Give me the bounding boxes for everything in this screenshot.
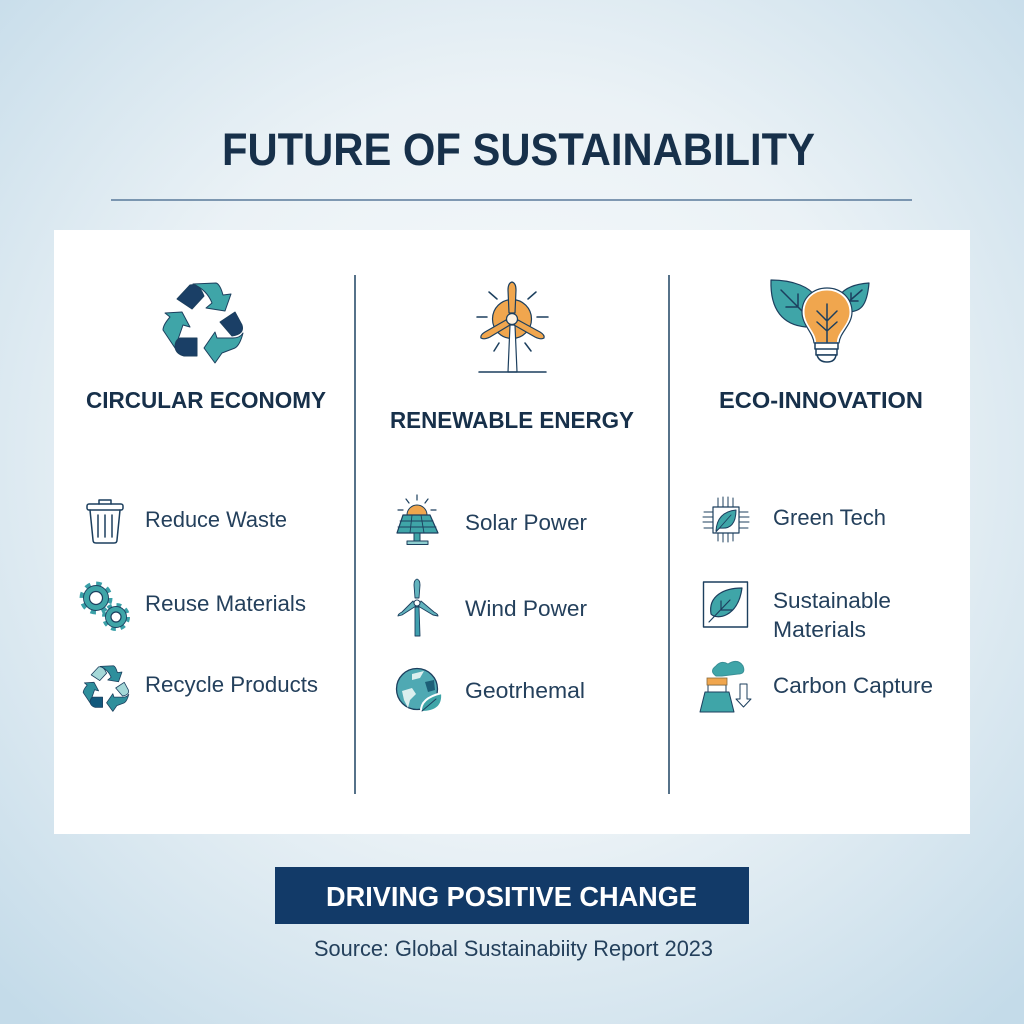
item: carbon capture [700, 661, 933, 712]
icon: recycle [163, 283, 243, 363]
item: green tech [703, 497, 886, 542]
title: FUTURE OF SUSTAINABILITY [222, 124, 815, 175]
item: sustainable materials: Materials [773, 617, 866, 642]
item: reuse materials: Reuse Materials [145, 591, 306, 616]
heading: eco-innovation: ECO-INNOVATION [719, 387, 923, 413]
column: eco-innovation [700, 280, 933, 712]
item: geothermal [396, 668, 585, 712]
item: reuse materials [82, 584, 306, 629]
main panel [54, 230, 970, 834]
item: recycle products: Recycle Products [145, 672, 318, 697]
item: wind power: Wind Power [465, 596, 587, 621]
banner [275, 867, 749, 924]
heading: circular economy: CIRCULAR ECONOMY [86, 387, 326, 413]
item: sustainable materials: Sustainable [773, 588, 891, 613]
item: solar power [397, 495, 587, 544]
column: renewable energy [390, 282, 634, 712]
item: reduce waste [87, 500, 287, 543]
item: carbon capture: Carbon Capture [773, 673, 933, 698]
item: wind power [398, 579, 587, 636]
item: geothermal: Geotrhemal [465, 678, 585, 703]
item: sustainable materials [704, 582, 891, 642]
item: reduce waste: Reduce Waste [145, 507, 287, 532]
heading: renewable energy: RENEWABLE ENERGY [390, 407, 634, 433]
source note: Source: Global Sustainabiity Report 2023 [314, 936, 713, 961]
item: green tech: Green Tech [773, 505, 886, 530]
banner: DRIVING POSITIVE CHANGE [326, 881, 697, 912]
item: recycle products [83, 666, 318, 711]
icon: lightbulb with leaves [771, 280, 869, 362]
item: solar power: Solar Power [465, 510, 587, 535]
icon: wind turbine with sun [477, 282, 548, 372]
column: circular economy [82, 283, 326, 711]
